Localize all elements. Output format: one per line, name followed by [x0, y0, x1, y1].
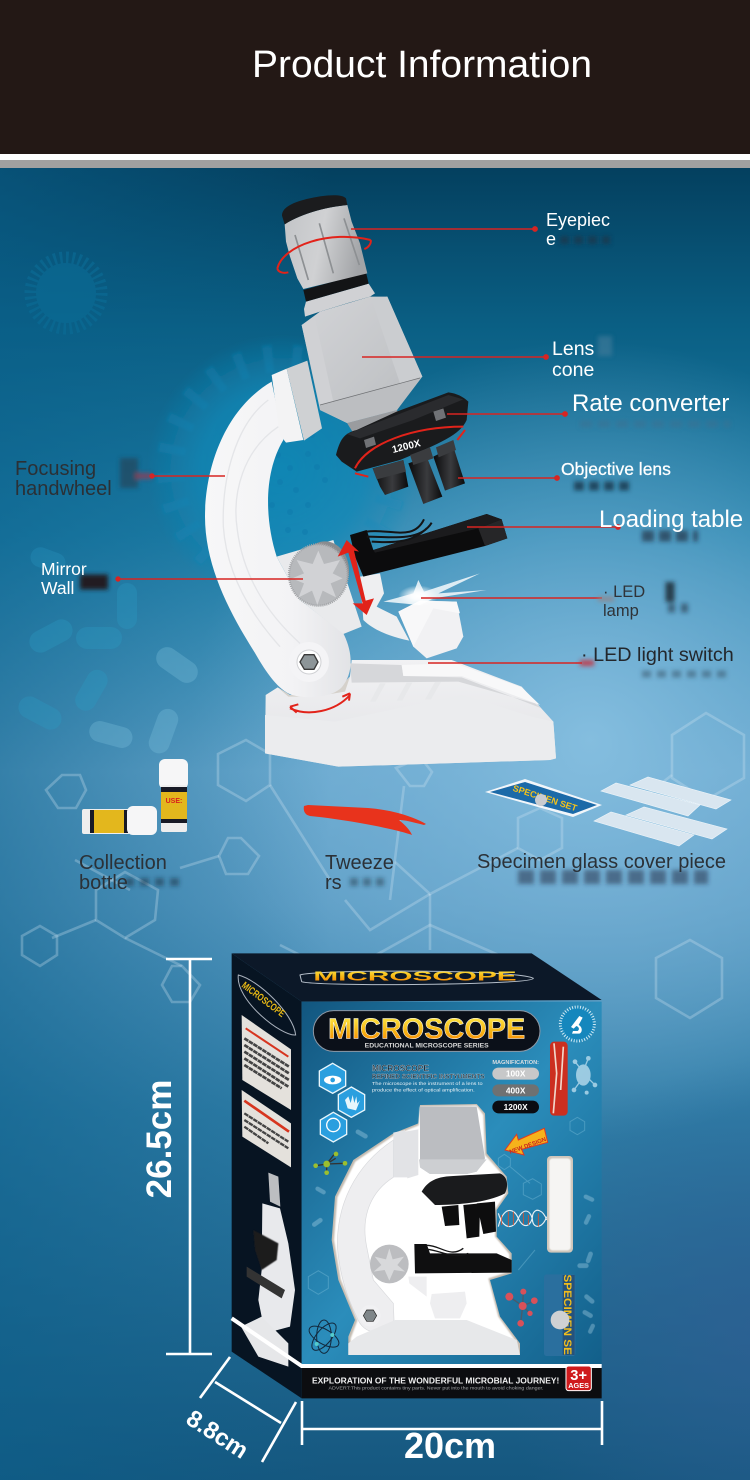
glass slides [594, 777, 731, 846]
label: magnification on nosepiece: 1200X [391, 438, 422, 456]
virus decoration [31, 258, 101, 328]
magnification options: 400X [506, 1085, 526, 1095]
lens cone [302, 297, 422, 423]
specimen card [485, 779, 602, 817]
title: Product Information [252, 44, 592, 86]
accessory: specimen slide set [485, 777, 731, 846]
age badge [566, 1366, 591, 1391]
new design arrow [505, 1128, 548, 1156]
label: Mirror Wall: Wall [41, 578, 74, 598]
side info panel 1 [242, 1015, 291, 1110]
black ring [303, 272, 369, 302]
side title oval: MICROSCOPE [240, 979, 287, 1019]
magnification options: 1200X [504, 1102, 528, 1112]
accessory: tweezers [304, 805, 426, 835]
label: Specimen glass cover piece: Specimen glass cover piece [477, 851, 726, 873]
side title oval [238, 975, 296, 1035]
new design arrow: NEW DESIGN [509, 1137, 547, 1156]
vertical red double arrow [338, 540, 374, 615]
label: Loading table: Loading table [599, 506, 743, 533]
brand title pill: EDUCATIONAL MICROSCOPE SERIES [365, 1044, 489, 1050]
box description text: MICROSCOPE [372, 1063, 429, 1073]
rotation arrow [277, 237, 371, 273]
nosepiece [422, 1173, 507, 1205]
upright bottle: USE: [166, 798, 182, 805]
loading table [350, 514, 507, 577]
specimen card: SPECIMEN SET [512, 783, 579, 813]
label: Eyepiece: Eyepiec [546, 210, 610, 230]
brand title pill: MICROSCOPE [328, 1014, 525, 1046]
wheel [370, 1245, 409, 1283]
red capsule tube [550, 1042, 568, 1116]
white slides window [547, 1156, 573, 1253]
label: Collection bottle: Collection [79, 852, 167, 874]
label: Eyepiece: e [546, 229, 556, 249]
microscope badge icon [560, 1007, 594, 1041]
focus wheel [289, 541, 349, 606]
box description text [372, 1063, 485, 1093]
magnification options: 100X [506, 1069, 526, 1079]
rotating nosepiece [336, 392, 468, 504]
molecule hexagon network [22, 713, 744, 1018]
label: Collection bottle: bottle [79, 872, 128, 894]
DNA helix [498, 1210, 547, 1227]
box top face: MICROSCOPE [313, 968, 517, 983]
hexagon feature icons [319, 1063, 365, 1142]
label: Rate converter: Rate converter [572, 390, 729, 417]
red rotation arrow [355, 427, 465, 477]
blurred smudges beside labels [80, 240, 732, 882]
magnification options: MAGNIFICATION: [492, 1060, 539, 1066]
side info panel 2 [242, 1090, 291, 1167]
objective lenses [373, 440, 465, 504]
label: Focusing handwheel: Focusing [15, 458, 96, 480]
virus icon [572, 1056, 597, 1095]
dimension: depth: 8.8cm [181, 1405, 253, 1465]
brand title pill [313, 1011, 540, 1051]
dots in arm hollow [259, 432, 343, 535]
dimension: width: 20cm [404, 1425, 496, 1466]
bottom band [232, 1318, 602, 1398]
dimension: width [302, 1401, 602, 1466]
label: Tweezers: Tweeze [325, 852, 394, 874]
magnification options [492, 1060, 539, 1113]
bottom band: EXPLORATION OF THE WONDERFUL MICROBIAL JOURNEY! [312, 1376, 559, 1386]
age badge: 3+ [570, 1368, 587, 1384]
box side face [232, 953, 302, 1398]
label: LED light switch: · LED light switch [581, 644, 734, 666]
label: Focusing handwheel: handwheel [15, 478, 112, 500]
objectives [442, 1202, 496, 1238]
arm [337, 1140, 394, 1332]
blister interior [334, 1106, 517, 1353]
table [414, 1244, 512, 1273]
box top face [232, 953, 602, 1002]
blister edge [332, 1104, 520, 1355]
collar [304, 284, 375, 317]
blister window and microscope in package [332, 1104, 520, 1355]
label: Lens cone: Lens [552, 338, 595, 360]
eyepiece body [285, 205, 367, 289]
age badge: AGES [568, 1381, 589, 1390]
red leader lines [116, 227, 620, 663]
label: LED lamp: lamp [603, 602, 639, 620]
accessory: collection bottles [82, 759, 188, 835]
label: LED lamp: · LED [603, 583, 645, 601]
large spiked decoration behind microscope [147, 335, 417, 605]
base rotation arrow [290, 693, 350, 713]
label: Tweezers: rs [325, 872, 342, 894]
capsule bacteria decoration [15, 544, 202, 756]
header band [0, 0, 750, 168]
box description text: produce the effect of optical amplification. [372, 1088, 475, 1093]
mirror lamp [360, 573, 463, 658]
box description text: The microscope is the instrument of a lens to [372, 1081, 483, 1086]
cone [420, 1107, 485, 1174]
base [348, 1320, 520, 1355]
dimension: height: 26.5cm [140, 1080, 179, 1198]
lamp arm and lamp [408, 1277, 467, 1318]
label: Mirror Wall: Mirror [41, 559, 87, 579]
microscope base [265, 660, 556, 767]
LED glow [383, 573, 487, 607]
hex bolt [359, 1305, 381, 1326]
bottom band: ADVERT:This product contains tiny parts. Never put into the mouth to avoid choking danger. [328, 1386, 543, 1391]
lying bottle [82, 806, 157, 835]
molecule icons [306, 1152, 538, 1354]
box description text: REFINED SCIENTIFIC INSTYUMENTS [372, 1075, 485, 1081]
dimension: height [140, 959, 212, 1354]
specimen set tube: SPECIMEN SE [561, 1274, 573, 1355]
bacteria capsules on package [311, 1129, 596, 1334]
label: Lens cone: cone [552, 359, 594, 381]
dimension: depth [181, 1357, 296, 1465]
side microscope image [241, 1173, 295, 1367]
packaging box [232, 953, 602, 1398]
microscope arm [205, 361, 362, 697]
box front panel [302, 1002, 602, 1365]
nosepiece neck [347, 410, 403, 438]
specimen set tube [544, 1274, 575, 1356]
lens cone and eyepiece [277, 195, 422, 438]
arm block [393, 1129, 418, 1178]
black cap [282, 195, 347, 224]
label: Objective lens: Objective lens [561, 459, 671, 479]
